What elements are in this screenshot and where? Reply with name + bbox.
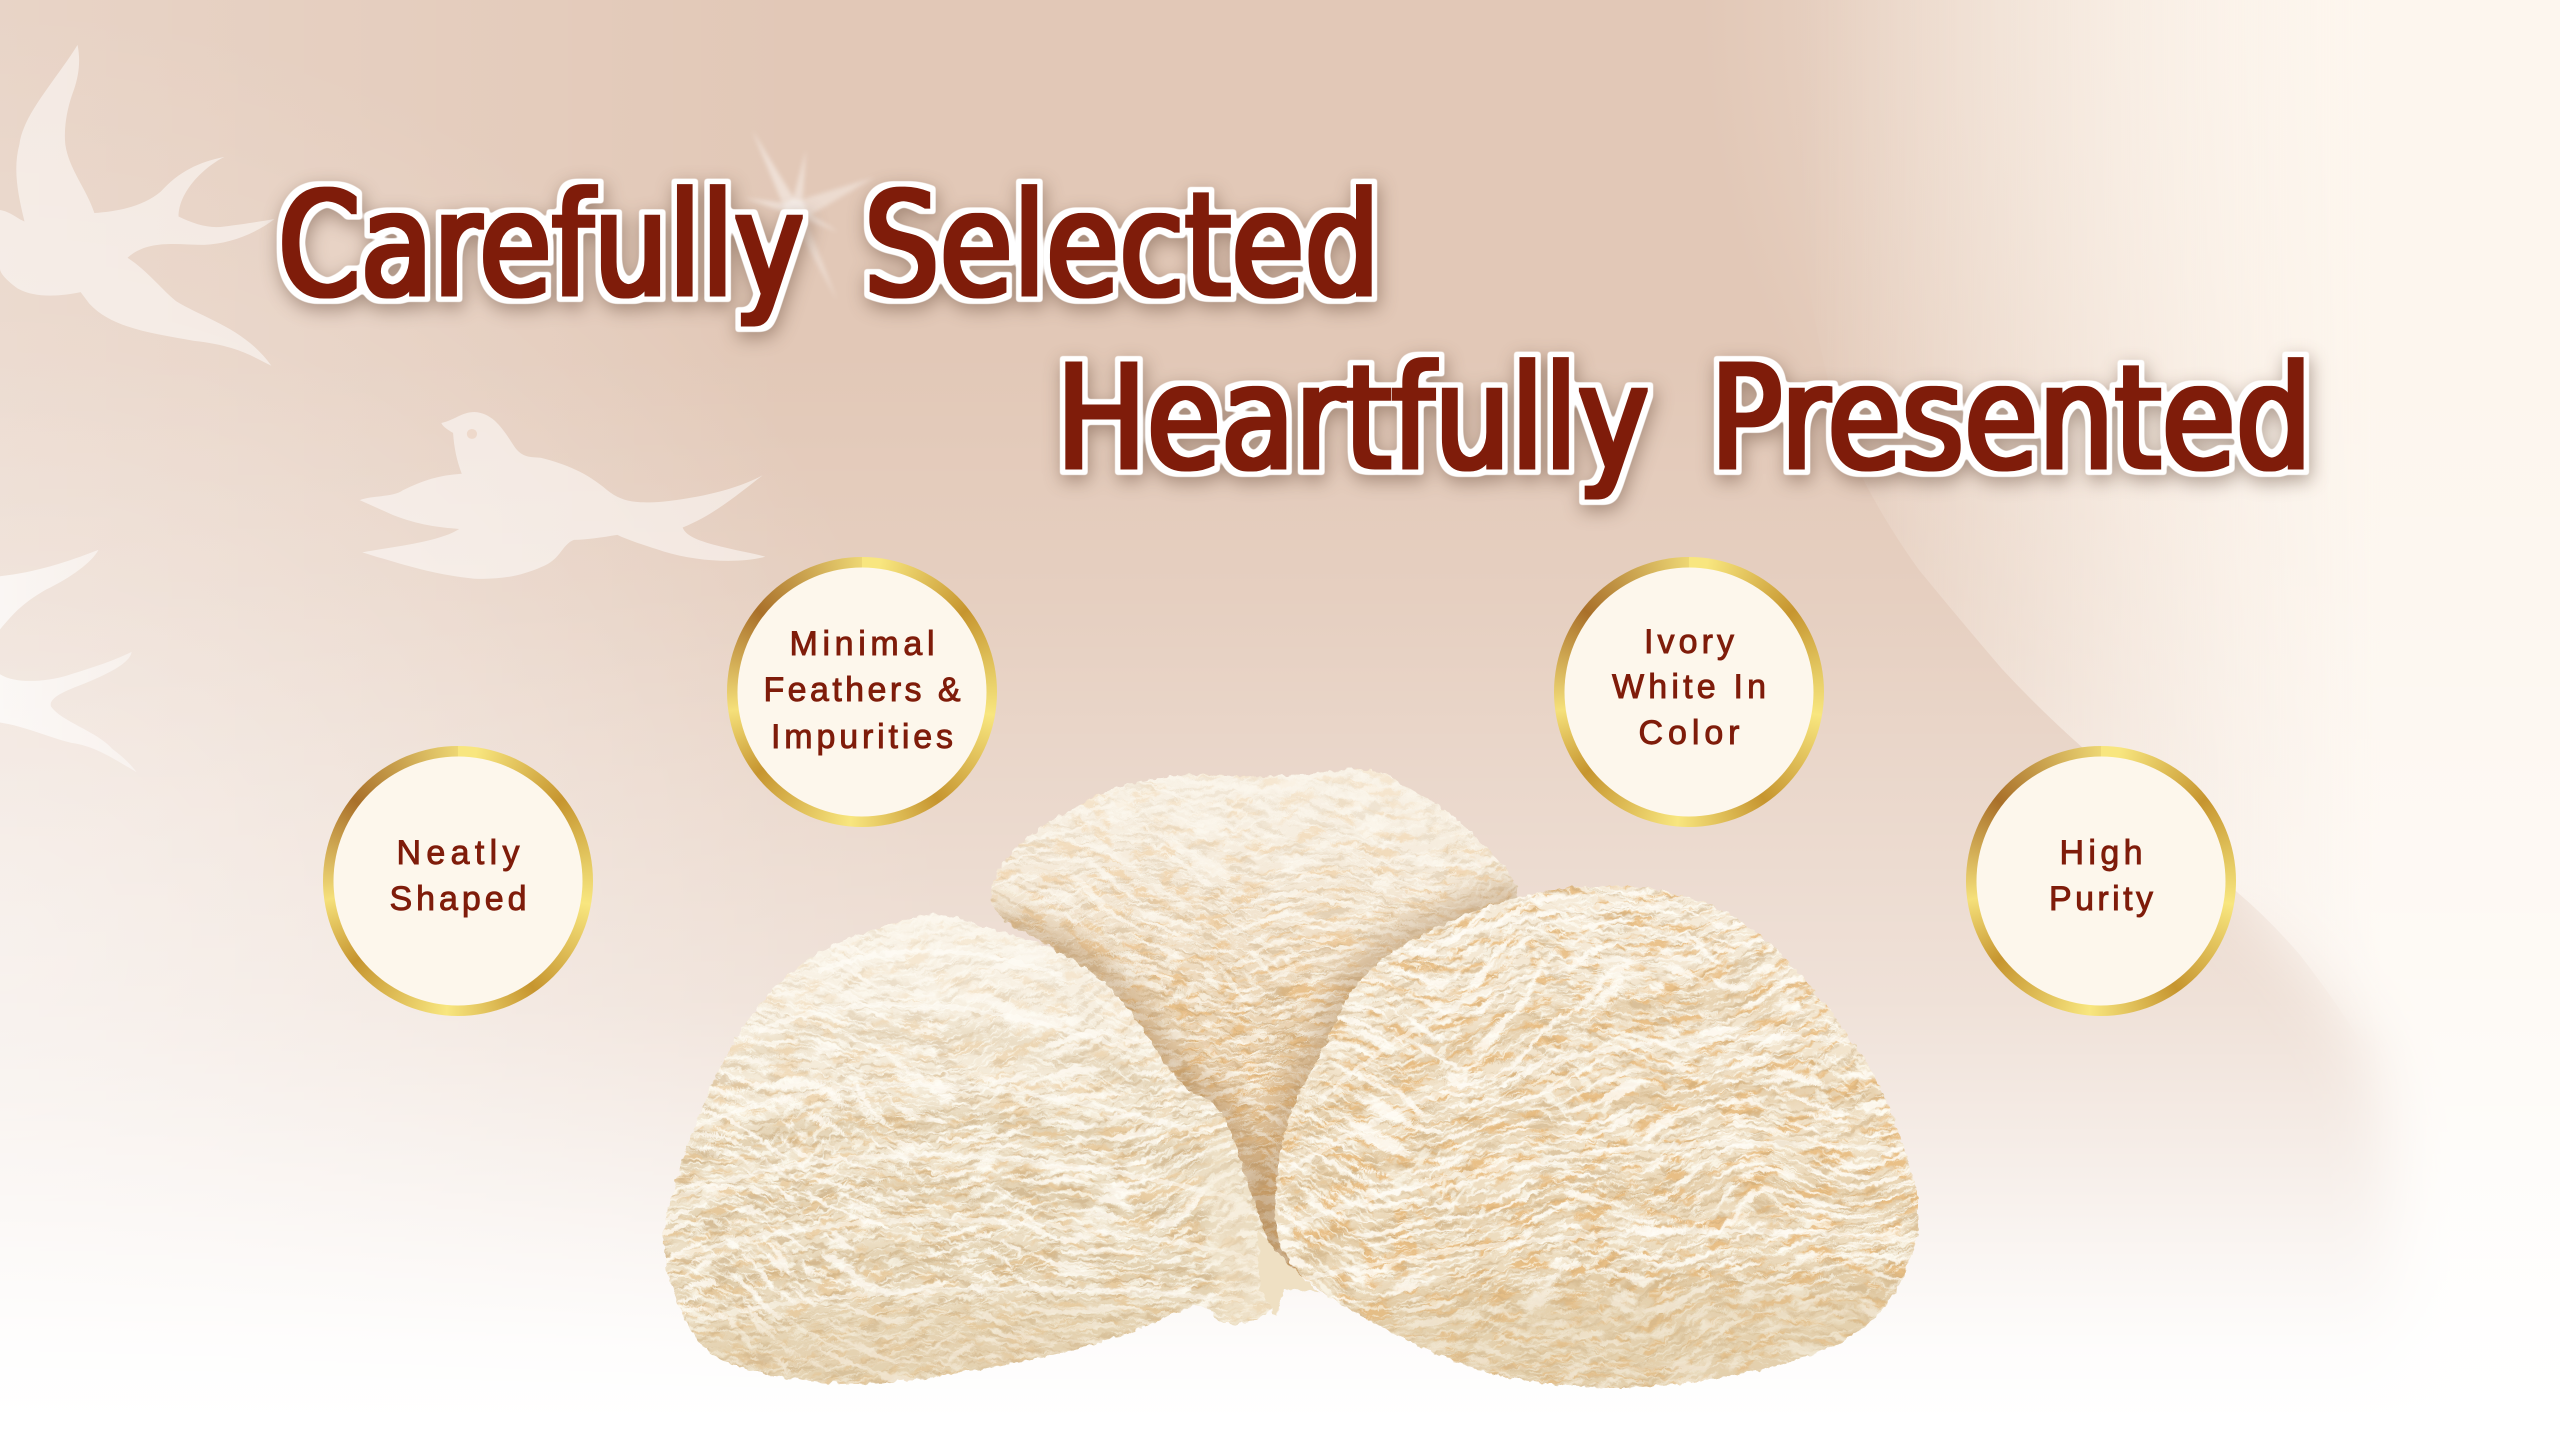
nest: left	[662, 912, 1272, 1386]
nest: back	[990, 768, 1518, 1276]
swallow silhouette: lower left, cropped	[0, 550, 137, 772]
badge: Ivory White In Color: White In	[1612, 668, 1766, 706]
badge: Neatly Shaped: Shaped	[390, 880, 526, 918]
title: two staggered lines	[278, 161, 2312, 502]
badge: Ivory White In Color	[1554, 557, 1824, 827]
badge: Ivory White In Color: Ivory	[1644, 623, 1734, 661]
badge: Minimal Feathers & Impurities: Feathers &	[764, 671, 961, 709]
title: two staggered lines: Carefully	[278, 161, 804, 329]
badge: Neatly Shaped: Neatly	[396, 834, 520, 872]
nest: centre knot	[1258, 1230, 1320, 1316]
badge: Minimal Feathers & Impurities	[727, 557, 997, 827]
badge: High Purity: Purity	[2049, 880, 2153, 918]
title: two staggered lines: Selected	[864, 161, 1380, 329]
badge: High Purity: High	[2060, 834, 2142, 872]
nest: right	[1274, 885, 1919, 1389]
badge: Minimal Feathers & Impurities: Impurities	[771, 718, 953, 756]
badge: Neatly Shaped	[323, 746, 593, 1016]
swallow silhouette: upper left	[0, 45, 274, 366]
badge: Minimal Feathers & Impurities: Minimal	[790, 625, 934, 663]
sparkle behind title	[745, 130, 875, 300]
title: two staggered lines: Presented	[1710, 334, 2312, 502]
bird's nests photo group	[662, 768, 1919, 1389]
bird silhouette: centre with eye	[360, 412, 765, 579]
badge: High Purity	[1966, 746, 2236, 1016]
title: two staggered lines: Heartfully	[1056, 334, 1649, 502]
badge: Ivory White In Color: Color	[1638, 714, 1740, 752]
